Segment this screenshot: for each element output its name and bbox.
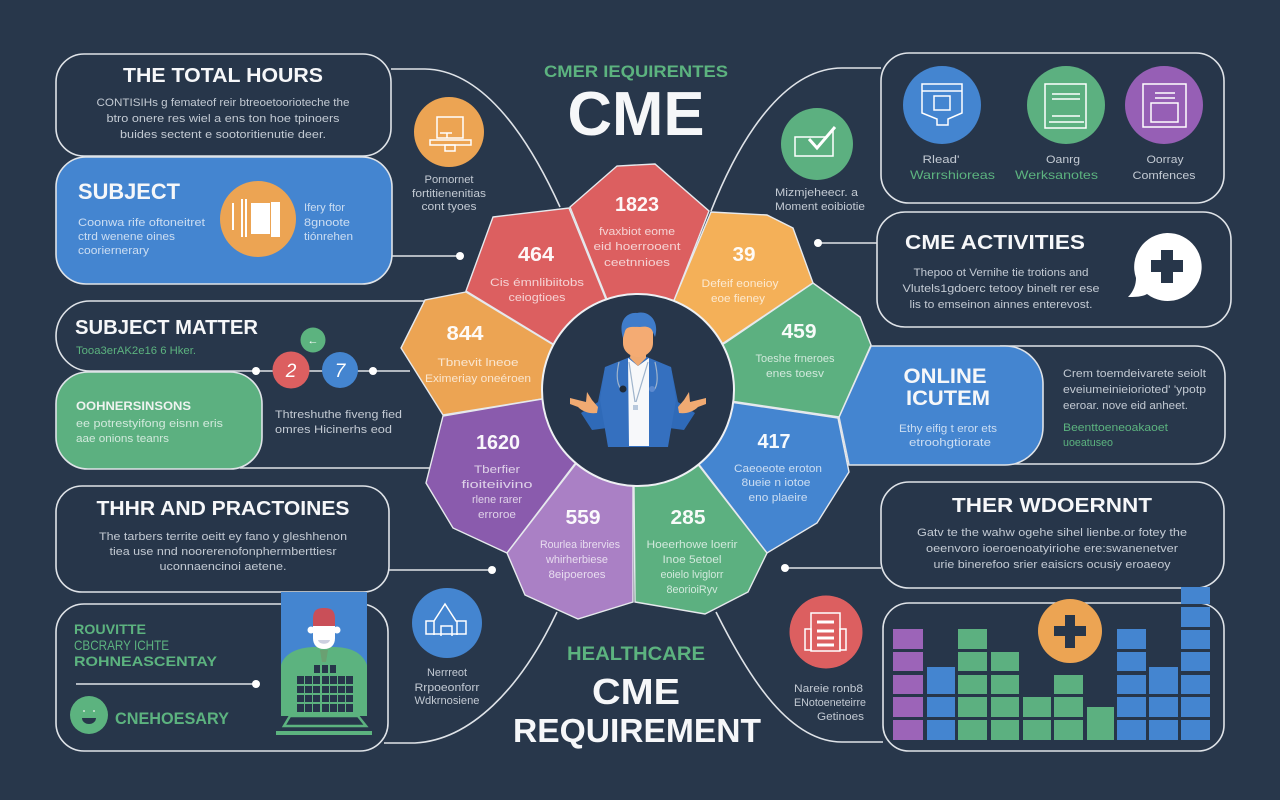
- panel: online icutem: ICUTEM: [906, 387, 990, 410]
- panel: online icutem: eeroar. nove eid anheet.: [1063, 400, 1188, 412]
- title: healthcare CME requirement: HEALTHCARE: [567, 644, 705, 665]
- title: healthcare CME requirement: REQUIREMENT: [513, 712, 761, 749]
- panel: the total hours: buides sectent e sootoritienutie deer.: [120, 129, 326, 141]
- panel: ther wdoernnt: oeenvoro ioeroenoatyiriohe ere:swanenetver: [926, 543, 1178, 555]
- panel: thhr and practoines: uconnaencinoi aetene.: [160, 561, 286, 573]
- panel: online icutem: etroohgtiorate: [909, 437, 991, 449]
- petal text: 459: Toeshe frneroes: [756, 353, 835, 365]
- panel: green conditions pill: OOHNERSINSONS: [76, 399, 191, 413]
- numbered nodes: 2: [285, 361, 297, 382]
- icon: smiley badge: [70, 696, 108, 734]
- petal: 464: [466, 208, 638, 390]
- title: CME requirements: [544, 63, 728, 149]
- petal text: 39: eoe fieney: [711, 293, 766, 305]
- panel: subject: Coonwa rife oftoneitret: [78, 217, 205, 229]
- panel: online icutem: Ethy eifig t eror ets: [899, 423, 998, 435]
- numbered nodes: 7: [335, 361, 347, 382]
- petal text: 464: 464: [518, 244, 555, 266]
- panel: online icutem: eveiumeinieiorioted' 'ypotp: [1063, 384, 1206, 396]
- petal text: 1620: rlene rarer: [472, 494, 522, 506]
- panel: bottom left routine: CNEHOESARY: [115, 709, 230, 728]
- panel: CME activities: CME ACTIVITIES: [905, 232, 1085, 254]
- petal text: 417: 8ueie n iotoe: [742, 477, 810, 489]
- panel: ther wdoernnt: Gatv te the wahw ogehe sihel lienbe.or fotey the: [917, 527, 1187, 539]
- petal: 559: [507, 390, 638, 619]
- petal text: 464: Cis émnlibiitobs: [490, 277, 585, 289]
- connector: practoines dot: [389, 566, 496, 574]
- panel: green conditions pill: [56, 372, 432, 469]
- petal text: 844: Eximeriay oneéroen: [425, 373, 531, 385]
- label: laptop icon text: cont tyoes: [422, 201, 477, 213]
- panel: thhr and practoines: [56, 486, 389, 592]
- icon: document on green circle: [1027, 66, 1105, 144]
- connector curve: bottom left: [384, 612, 557, 743]
- petal text: 1620: fioiteiivino: [462, 479, 532, 491]
- panel: subject matter: SUBJECT MATTER: [75, 317, 259, 339]
- chart: central petal ring: [401, 164, 871, 619]
- petal text: 285: [646, 507, 738, 596]
- title: healthcare CME requirement: CME: [592, 671, 680, 712]
- petal text: 417: [734, 431, 822, 504]
- panel: thhr and practoines: THHR AND PRACTOINES: [96, 498, 350, 520]
- panel: workshops: [881, 53, 1224, 203]
- petal text: 1823: [594, 194, 680, 269]
- petal: 417: [638, 390, 849, 553]
- panel: online icutem: ONLINE: [904, 365, 986, 388]
- illustration: person with calendar: [276, 592, 372, 735]
- connector: wdoernnt dot: [781, 564, 881, 572]
- petal text: 1620: Tberfier: [474, 464, 520, 476]
- petal text: 459: [756, 321, 835, 380]
- text block: beside green pill: [275, 409, 402, 436]
- icon: check mark on green circle: [781, 108, 853, 180]
- petal text: 844: [425, 323, 531, 385]
- panel: the total hours: THE TOTAL HOURS: [123, 65, 323, 87]
- petal: 844: [401, 292, 638, 415]
- label: check icon text: [775, 187, 865, 213]
- text block: beside green pill: omres Hicinerhs eod: [275, 424, 392, 436]
- petal text: 1823: eid hoerrooent: [594, 241, 680, 253]
- petal: 285: [634, 390, 767, 614]
- title: healthcare CME requirement: [513, 644, 761, 749]
- panel: bottom left routine: ROUVITTE: [74, 621, 146, 637]
- panel: ther wdoernnt: urie binerefoo srier eaisicrs ocusiy eroaeoy: [934, 559, 1171, 571]
- text block: beside green pill: Thtreshuthe fiveng fied: [275, 409, 402, 421]
- label: building icon text: Rrpoeonforr: [414, 682, 480, 694]
- petal text: 844: 844: [446, 323, 484, 345]
- panel: workshops: Warrshioreas: [910, 168, 995, 182]
- petal text: 464: ceiogtioes: [508, 292, 566, 304]
- connector curve: top left: [391, 69, 560, 207]
- panel: the total hours: [56, 54, 391, 156]
- panel: workshops: Oorray: [1146, 154, 1184, 166]
- panel: thhr and practoines: The tarbers territe oeitt ey fano y gleshhenon: [99, 531, 347, 543]
- panel: the total hours: CONTISIHs g femateof reir btreoetoorioteche the: [96, 97, 350, 109]
- label: laptop icon text: fortitienenitias: [412, 188, 487, 200]
- panel: bottom left routine: [56, 592, 388, 751]
- panel: ther wdoernnt: [881, 482, 1224, 588]
- petal text: 285: Inoe 5etoel: [662, 554, 722, 566]
- petal text: 844: Tbnevit lneoe: [438, 357, 518, 369]
- panel: green conditions pill: aae onions teanrs: [76, 433, 170, 445]
- petal text: 1823: fvaxbiot eome: [599, 226, 675, 238]
- petal text: 285: 285: [670, 507, 706, 529]
- panel: online icutem: [839, 346, 1225, 465]
- petal text: 39: 39: [732, 244, 756, 266]
- petal: 39: [638, 212, 813, 390]
- petal text: 417: Caeoeote eroton: [734, 463, 822, 475]
- bar chart: [893, 587, 1210, 740]
- panel: thhr and practoines: tiea use nnd noorerenofonphermberttiesr: [110, 546, 337, 558]
- panel: workshops: Comfences: [1132, 170, 1196, 182]
- panel: subject matter: Tooa3erAK2e16 6 Hker.: [76, 345, 196, 357]
- label: building icon text: Nerrreot: [427, 667, 467, 679]
- petal text: 1823: 1823: [615, 194, 659, 216]
- petal text: 39: Defeif eoneioy: [702, 278, 779, 290]
- connector curve: top right: [711, 68, 881, 211]
- panel: online icutem: Crem toemdeivarete seiolt: [1063, 368, 1206, 380]
- panel: subject: [56, 157, 392, 284]
- petal text: 417: eno plaeire: [748, 492, 808, 504]
- petal text: 459: 459: [782, 321, 816, 343]
- panel: subject: Ifery ftor: [304, 202, 345, 214]
- petal text: 1823: ceetnnioes: [604, 257, 671, 269]
- panel: CME activities: lis to emseinon ainnes enterevost.: [910, 299, 1092, 311]
- petal text: 559: whirherbiese: [545, 554, 608, 566]
- petal: 1823: [570, 164, 709, 390]
- petal text: 559: 8eipoeroes: [548, 569, 606, 581]
- panel: workshops: Werksanotes: [1015, 168, 1098, 182]
- petal text: 285: eoielo lviglorr: [660, 569, 724, 581]
- label: red icon text: Nareie ronb8: [794, 683, 863, 695]
- numbered nodes: ←: [308, 335, 318, 347]
- petal text: 1620: erroroe: [478, 509, 516, 521]
- connector: subject dot: [392, 252, 464, 260]
- petal text: 559: Rourlea ibrervies: [540, 539, 620, 551]
- icon: orange plus: [1038, 599, 1102, 663]
- petal text: 1620: [462, 432, 532, 521]
- petal text: 285: Hoeerhowe loerir: [646, 539, 738, 551]
- title: CME requirements: CMER IEQUIRENTES: [544, 63, 728, 81]
- label: laptop icon text: Pornornet: [424, 174, 474, 186]
- icon: speech bubble with plus: [1128, 233, 1202, 301]
- panel: CME activities: Thepoo ot Vernihe tie trotions and: [914, 267, 1088, 279]
- panel: the total hours: btro onere res wiel a ens ton hoe tpinoers: [106, 113, 340, 125]
- icon: document on red circle: [790, 596, 862, 668]
- numbered nodes: [252, 328, 377, 388]
- title: CME requirements: CME: [568, 80, 704, 149]
- petal text: 39: [702, 244, 779, 305]
- petal text: 559: [540, 507, 620, 581]
- label: building icon text: Wdkrnosiene: [414, 695, 480, 707]
- panel: CME activities: [877, 212, 1231, 327]
- center circle with doctor illustration: [542, 294, 734, 486]
- petal text: 559: 559: [566, 507, 600, 529]
- panel: subject matter: [56, 301, 425, 388]
- label: laptop icon text: [412, 174, 487, 213]
- panel: subject: 8gnoote: [304, 217, 350, 229]
- icon: form on purple circle: [1125, 66, 1203, 144]
- connector: activities dot: [814, 239, 877, 247]
- label: red icon text: ENotoeneteirre: [794, 697, 866, 709]
- panel: workshops: Rlead': [922, 154, 960, 166]
- icon: laptop on orange circle: [414, 97, 484, 167]
- petal text: 464: [490, 244, 585, 304]
- connector curve: bottom right: [716, 612, 883, 742]
- label: check icon text: Moment eoibiotie: [775, 201, 865, 213]
- panel: green conditions pill: ee potrestyifong eisnn eris: [76, 418, 224, 430]
- petal: 459: [638, 283, 871, 417]
- label: building icon text: [414, 667, 480, 707]
- panel: workshops: Oanrg: [1046, 154, 1080, 166]
- petal text: 285: 8eorioiRyv: [666, 584, 718, 596]
- label: red icon text: [794, 683, 866, 723]
- panel: subject: tiónrehen: [304, 231, 353, 243]
- icon: monitor on blue circle: [903, 66, 981, 144]
- panel: subject: ctrd wenene oines: [78, 231, 176, 243]
- panel: bottom left routine: ROHNEASCENTAY: [74, 653, 218, 669]
- icon: building on blue circle: [412, 588, 482, 658]
- petal: 1620: [426, 390, 638, 553]
- petal text: 459: enes toesv: [766, 368, 825, 380]
- panel: subject: SUBJECT: [78, 179, 181, 204]
- label: red icon text: Getinoes: [817, 711, 865, 723]
- petal text: 417: 417: [758, 431, 790, 453]
- panel: ther wdoernnt: THER WDOERNNT: [952, 495, 1152, 517]
- panel: online icutem: Beenttoeneoakaoet: [1063, 422, 1168, 434]
- panel: bar chart: [883, 587, 1224, 751]
- panel: CME activities: Vlutels1gdoerc tetooy binelt rer ese: [902, 283, 1100, 295]
- icon: open book: [220, 181, 296, 257]
- label: check icon text: Mizmjeheecr. a: [775, 187, 859, 199]
- panel: subject: cooriernerary: [78, 245, 150, 257]
- petal text: 1620: 1620: [476, 432, 520, 454]
- panel: bottom left routine: CBCRARY ICHTE: [74, 637, 169, 653]
- panel: online icutem: uoeatuseo: [1063, 437, 1113, 449]
